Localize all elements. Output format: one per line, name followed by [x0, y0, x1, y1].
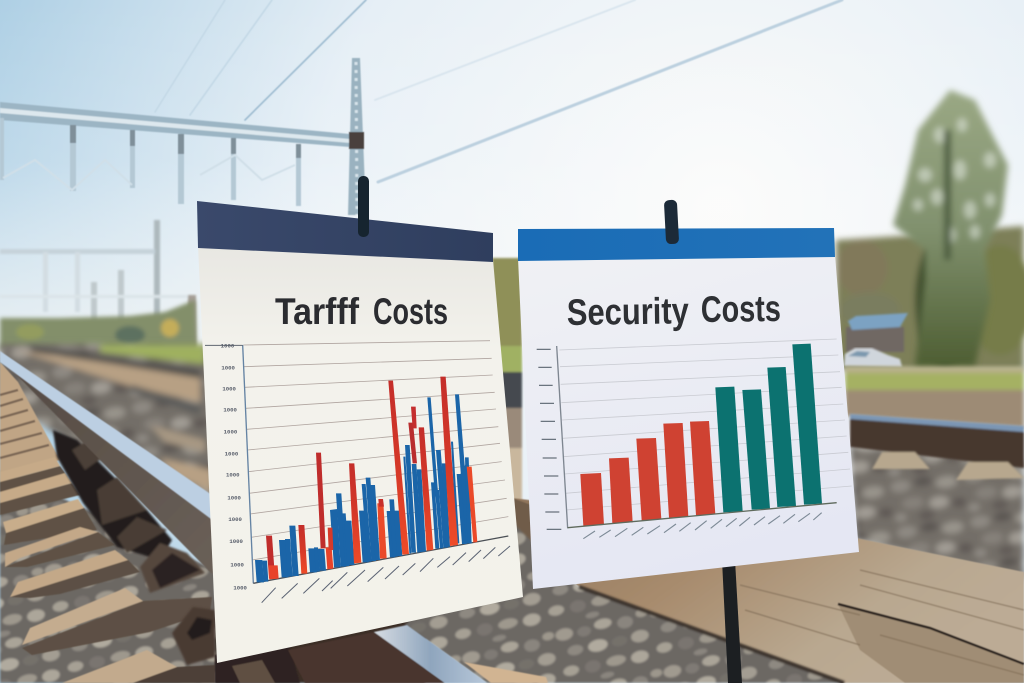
y axis labels: 1000 — [224, 429, 238, 436]
background: distant gantries — [0, 220, 196, 347]
grid lines — [243, 341, 508, 560]
card body — [198, 245, 523, 663]
chart: tariff costs bars — [205, 341, 510, 603]
foreground: rail below the left card — [215, 625, 548, 683]
y axis — [243, 345, 253, 583]
background: field — [845, 367, 1024, 428]
background: wooden platform — [512, 498, 1024, 683]
background: house — [846, 313, 908, 352]
background: big tree — [893, 90, 1008, 366]
y axis labels: 1000 — [221, 364, 236, 371]
grid lines — [559, 339, 852, 510]
teal bars — [715, 344, 822, 512]
background: distant tree line — [0, 300, 197, 350]
x axis slashes — [262, 546, 510, 603]
background: far right trees — [836, 226, 1024, 370]
red and orange bars — [266, 377, 477, 579]
y axis labels — [221, 342, 248, 591]
blue bars — [255, 394, 472, 582]
x axis — [568, 503, 837, 528]
y ticks — [537, 349, 561, 529]
y axis labels: 1000 — [226, 472, 240, 479]
title: Security Costs: Costs — [701, 288, 781, 330]
y axis labels: 1000 — [227, 494, 242, 501]
background: mid left trackbed — [0, 344, 215, 530]
background: overhead wires — [155, 0, 842, 182]
title: Tarfff Costs: Tarfff — [275, 291, 360, 332]
far sleepers — [0, 362, 60, 474]
title: Security Costs — [567, 288, 781, 333]
clip: left card — [358, 176, 369, 237]
y axis labels: 1000 — [223, 407, 238, 414]
foreground: rail web — [0, 358, 215, 575]
y axis labels: 1000 — [221, 342, 235, 349]
pole — [722, 560, 742, 683]
blue card header — [518, 228, 835, 261]
y axis labels: 1000 — [230, 562, 245, 569]
title: Security Costs: Security — [567, 290, 689, 333]
x axis — [253, 536, 508, 583]
clip: right card — [664, 200, 679, 244]
y axis — [557, 346, 568, 528]
card body — [518, 255, 859, 589]
security costs card — [518, 200, 859, 683]
y axis labels: 1000 — [229, 538, 244, 545]
title: Tarfff Costs — [275, 291, 448, 332]
y axis labels: 1000 — [222, 386, 237, 393]
top tick — [205, 344, 243, 347]
background: far right rail — [850, 414, 1024, 480]
y axis labels: 1000 — [233, 584, 248, 591]
foreground: bottom left sleepers — [0, 362, 215, 683]
background: strip between the two cards — [492, 258, 522, 503]
y axis labels: 1000 — [228, 516, 243, 523]
title: Tarfff Costs: Costs — [373, 291, 448, 332]
navy card header — [197, 201, 493, 262]
foreground: rail clips — [53, 430, 215, 665]
foreground: ballast and bottom base — [0, 470, 844, 683]
tariff costs card — [197, 176, 523, 663]
background: far right gravel — [850, 445, 1024, 580]
x ticks — [583, 513, 822, 539]
chart: security costs bars — [537, 339, 852, 539]
background: parked car — [844, 348, 902, 367]
foreground: rail head — [0, 351, 215, 522]
red bars — [580, 421, 715, 526]
background: catenary gantry and tower — [0, 58, 366, 215]
y axis labels: 1000 — [225, 450, 239, 457]
